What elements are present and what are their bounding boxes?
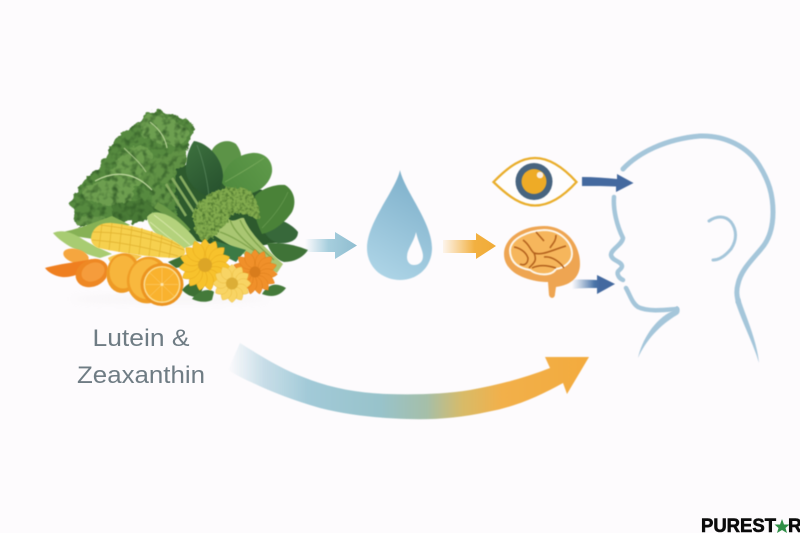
- leaves under flowers: [168, 240, 286, 302]
- arrow: droplet to brain: [443, 233, 496, 259]
- illustration: lutein and zeaxanthin foods: [45, 110, 308, 307]
- icon: eye: [494, 158, 576, 206]
- yellow marigold: [179, 239, 231, 292]
- broccoli stem: [212, 216, 283, 273]
- label: Lutein & Zeaxanthin: [77, 325, 205, 389]
- arrow: large curved gradient swoosh: [228, 343, 589, 419]
- label: Lutein & Zeaxanthin: Zeaxanthin: [77, 362, 205, 389]
- spinach leaves: [186, 141, 308, 262]
- icon: water drop: [367, 170, 432, 280]
- broccoli florets: [193, 187, 260, 242]
- orange slices: [103, 250, 184, 307]
- head profile: neck front and back tapered strokes: [638, 298, 759, 363]
- orange marigold: [232, 250, 278, 295]
- kale ribs and stems: [95, 122, 200, 232]
- dark backdrop behind stems and leaves: [165, 165, 290, 250]
- icon: brain: [504, 226, 580, 298]
- pale yellow marigold: [213, 264, 251, 302]
- head profile outline: [611, 136, 773, 310]
- arrow: brain to head: [572, 275, 615, 294]
- corn cob: [91, 223, 185, 258]
- corn husks: [53, 212, 198, 258]
- carrots: [45, 246, 113, 292]
- arrow: eye to head: [582, 174, 634, 192]
- arrow: food to droplet: [305, 232, 357, 259]
- kale: [72, 110, 193, 229]
- label: Lutein & Zeaxanthin: Lutein &: [92, 325, 190, 352]
